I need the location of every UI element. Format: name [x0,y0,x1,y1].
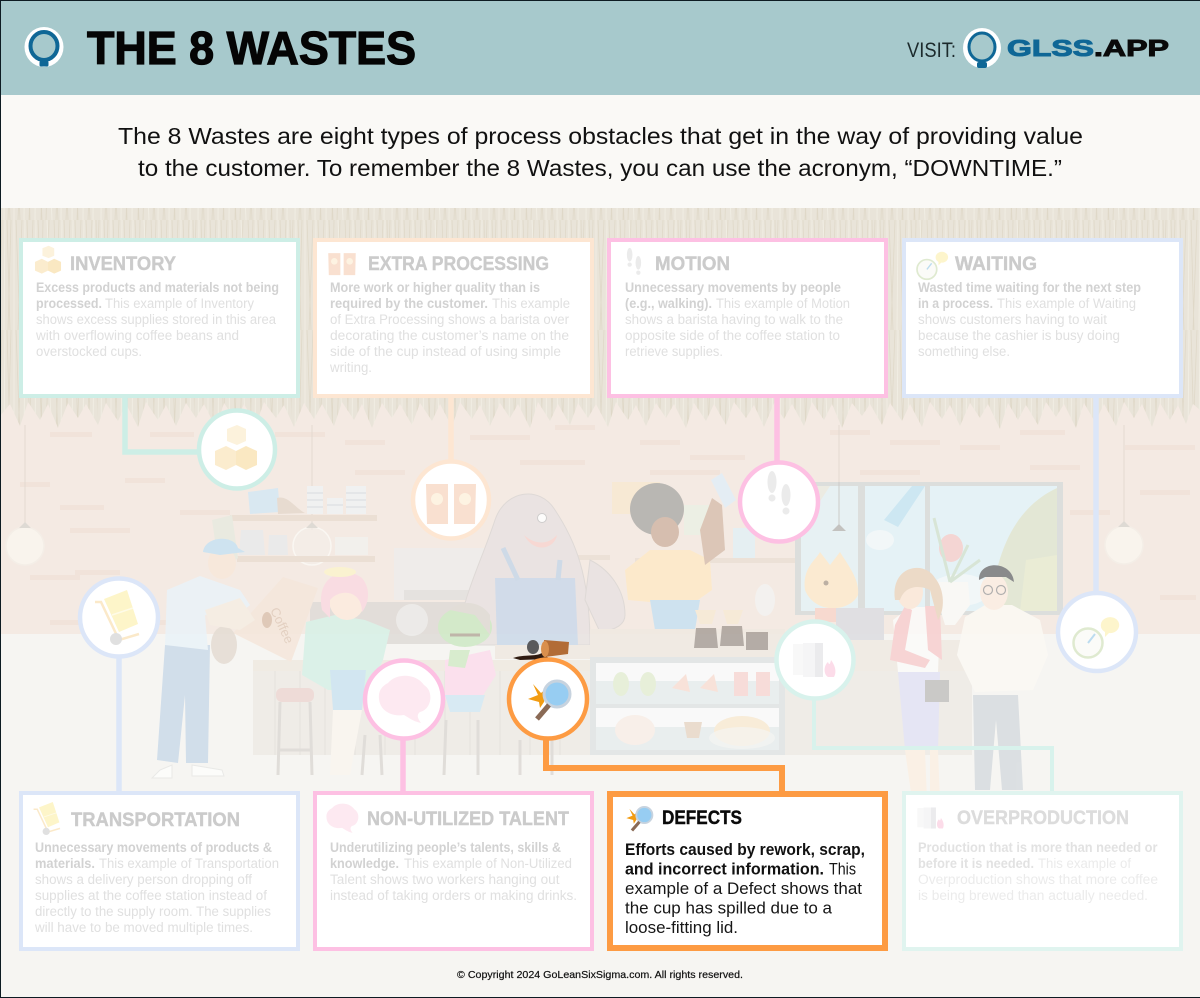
panel: inventory [21,240,298,396]
panel: transportation: will have to be moved multiple times. [34,920,253,935]
marker: waiting [1058,593,1136,671]
cafe scene [6,425,1143,800]
panel: waiting: shows customers having to wait [918,312,1107,327]
intro text [118,123,1083,181]
panel: inventory: shows excess supplies stored in this area [36,312,276,327]
panel: motion: Unnecessary movements by people [625,280,841,295]
marker: inventory [199,410,275,488]
marker: transportation [80,578,158,656]
intro band [0,95,1200,208]
panel: overproduction: Production that is more than needed or [918,840,1158,855]
panel: transportation: Unnecessary movements of products & [35,840,272,855]
character: barista with afro [625,483,725,630]
vase with flowers [932,518,980,625]
panel: defects [610,794,885,948]
header logo [24,27,64,67]
window with tropical view [795,482,1063,615]
panel: transportation: supplies at the coffee station instead of [35,888,267,903]
panel: extra processing: required by the customer. [330,296,488,311]
character: delivery person with coffee bag: Coffee [267,605,297,646]
panel: inventory: overstocked cups. [36,344,142,359]
panel: waiting: something else. [918,344,1010,359]
character: green frog [438,603,496,712]
panel: extra processing: More work or higher quality than is [330,280,540,295]
visit logo [963,28,1001,68]
character: fox cashier [805,552,884,644]
panel: non-utilized talent: knowledge. [330,856,399,871]
character: customer woman [890,568,949,800]
hanging lamps [6,425,1143,565]
panel: waiting: This example of Waiting [997,296,1136,311]
title: THE 8 WASTES [87,22,416,74]
character: walrus barista [455,494,625,645]
panel: transportation: materials. [35,856,95,871]
panel: waiting: in a process. [918,296,993,311]
panel: non-utilized talent [315,793,592,949]
panel: non-utilized talent: NON-UTILIZED TALENT [367,808,569,830]
counter top [253,629,970,672]
glss.app wordmark: .APP [1094,35,1169,61]
panel: motion: This example of Motion [716,296,850,311]
panel: extra processing: of Extra Processing shows a barista over [330,312,569,327]
character: barista girl [302,567,390,775]
panel: overproduction: is being brewed than actually needed. [918,888,1148,903]
panel: transportation: directly to the supply room. The supplies [35,904,271,919]
panel: extra processing [315,240,592,396]
panel: inventory: INVENTORY [70,253,176,275]
connector lines [119,398,1096,793]
panel: defects: Efforts caused by rework, scrap, [625,841,865,859]
panel: transportation: shows a delivery person dropping off [35,872,252,887]
panel: motion: MOTION [655,253,730,275]
panel: waiting: Wasted time waiting for the next step [918,280,1141,295]
panel: motion: (e.g., walking). [625,296,712,311]
marker: extra processing [413,462,489,538]
panel: motion: shows a barista having to walk to the [625,312,843,327]
intro text: The 8 Wastes are eight types of process obstacles that get in the way of providing value [118,123,1083,149]
panel: motion [609,240,886,396]
glss.app wordmark [1007,35,1169,61]
header band [0,0,1200,95]
panel: non-utilized talent: This example of Non-Utilized [404,856,572,871]
panel: non-utilized talent: instead of taking orders or making drinks. [330,888,577,903]
panel: inventory: Excess products and materials not being [36,280,279,295]
panel: overproduction: Overproduction shows that more coffee [918,872,1158,887]
character: delivery person with coffee bag [152,539,318,778]
pastry display case [590,657,785,755]
panel: extra processing: side of the cup instead of using simple [330,344,561,359]
marker: non-utilized talent [365,660,443,738]
espresso machine [310,548,494,644]
panel: waiting: because the cashier is busy doing [918,328,1120,343]
panel: defects: and incorrect information. [625,860,824,878]
panel: extra processing: writing. [329,360,372,375]
background: thatched roof [0,208,1200,429]
visit label: VISIT: [907,39,956,62]
panel: motion: retrieve supplies. [625,344,723,359]
panel: transportation [21,793,298,949]
panel: overproduction: before it is needed. [918,856,1034,871]
panel: defects: loose-fitting lid. [625,919,738,937]
marker: motion [740,462,818,542]
background: brick wall [0,400,1200,634]
panel: defects: DEFECTS [662,807,742,829]
panel: transportation: This example of Transportation [99,856,279,871]
pour-over coffee pots [694,610,768,650]
panel: defects: example of a Defect shows that [625,880,862,898]
copyright: © Copyright 2024 GoLeanSixSigma.com. All rights reserved. [457,969,743,981]
panel: transportation: TRANSPORTATION [71,809,240,831]
panel: extra processing: This example [492,296,570,311]
panel: extra processing: EXTRA PROCESSING [368,253,549,275]
panel: inventory: This example of Inventory [105,296,254,311]
panel: motion: opposite side of the coffee station to [625,328,840,343]
panel: inventory: with overflowing coffee beans and [35,328,239,343]
shelves with supplies [212,473,795,616]
spilled coffee cup [513,640,569,660]
panel: overproduction [904,793,1181,949]
panel: overproduction: This example of [1038,856,1131,871]
panel: extra processing: decorating the customer’s name on the [330,328,569,343]
panel: non-utilized talent: Talent shows two workers hanging out [330,872,560,887]
coffee counter fronts and bar stools [253,671,972,775]
panel: defects: This [829,860,856,878]
marker: overproduction [776,622,854,698]
character: customer man with glasses [957,565,1048,790]
panel: inventory: processed. [36,296,102,311]
panel: defects: the cup has spilled due to a [625,900,833,918]
glss.app wordmark: GLSS [1007,35,1094,61]
panel: non-utilized talent: Underutilizing people’s talents, skills & [330,840,561,855]
intro text: to the customer. To remember the 8 Wastes, you can use the acronym, “DOWNTIME.” [138,155,1062,181]
panel: overproduction: OVERPRODUCTION [957,807,1129,829]
marker: defects [509,660,587,738]
panel: waiting [904,240,1181,396]
panel: waiting: WAITING [955,253,1037,275]
